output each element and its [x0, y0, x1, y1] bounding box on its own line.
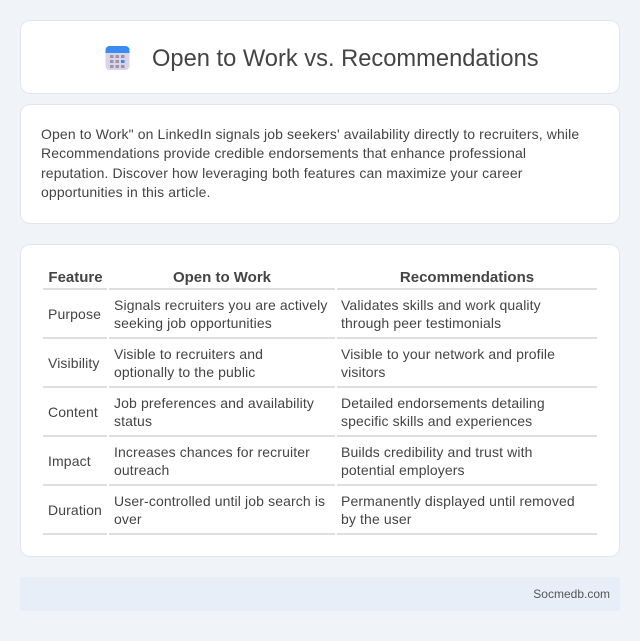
row: duration: Duration [48, 502, 102, 518]
row: visibility: Visibility [48, 355, 100, 371]
column headers [48, 269, 534, 286]
row: duration [48, 493, 575, 527]
row: purpose: through peer testimonials [341, 315, 501, 331]
header panel [20, 20, 620, 94]
table content [43, 269, 597, 535]
row: duration: by the user [341, 511, 412, 527]
intro paragraph: Recommendations provide credible endorsements that enhance professional [41, 145, 526, 161]
column headers: Open to Work [173, 269, 271, 286]
column headers: Feature [48, 269, 103, 286]
row: impact [48, 444, 532, 478]
intro paragraph: Open to Work" on LinkedIn signals job seekers' availability directly to recruiters, while [41, 126, 579, 142]
row: visibility: Visible to recruiters and [114, 346, 263, 362]
row: content: specific skills and experiences [341, 413, 532, 429]
intro text panel [20, 104, 620, 224]
intro paragraph: reputation. Discover how leveraging both features can maximize your career [41, 165, 523, 181]
row: content: Content [48, 404, 98, 420]
row: content: Detailed endorsements detailing [341, 395, 545, 411]
title: Open to Work vs. Recommendations [152, 46, 539, 72]
row: purpose: seeking job opportunities [114, 315, 272, 331]
row: impact: outreach [114, 462, 169, 478]
column headers: Recommendations [400, 269, 534, 286]
row: purpose [48, 297, 541, 331]
row: duration: Permanently displayed until removed [341, 493, 575, 509]
comparison table panel [20, 244, 620, 557]
footer source text: Socmedb.com [533, 587, 610, 601]
row: visibility: Visible to your network and profile [341, 346, 555, 362]
row: visibility: optionally to the public [114, 364, 255, 380]
row: purpose: Signals recruiters you are actively [114, 297, 328, 313]
footer bar [20, 577, 620, 611]
row: impact: potential employers [341, 462, 465, 478]
intro paragraph: opportunities in this article. [41, 184, 211, 200]
row: purpose: Validates skills and work quality [341, 297, 541, 313]
row: content [48, 395, 545, 429]
icon: calendar [106, 46, 130, 70]
row: visibility: visitors [341, 364, 386, 380]
row: visibility [48, 346, 555, 380]
row: content: Job preferences and availability [114, 395, 314, 411]
row: impact: Impact [48, 453, 91, 469]
row: duration: over [114, 511, 142, 527]
row: impact: Increases chances for recruiter [114, 444, 310, 460]
row: content: status [114, 413, 152, 429]
row: duration: User-controlled until job search is [114, 493, 325, 509]
row: impact: Builds credibility and trust with [341, 444, 532, 460]
intro paragraph [41, 126, 579, 200]
row: purpose: Purpose [48, 306, 101, 322]
